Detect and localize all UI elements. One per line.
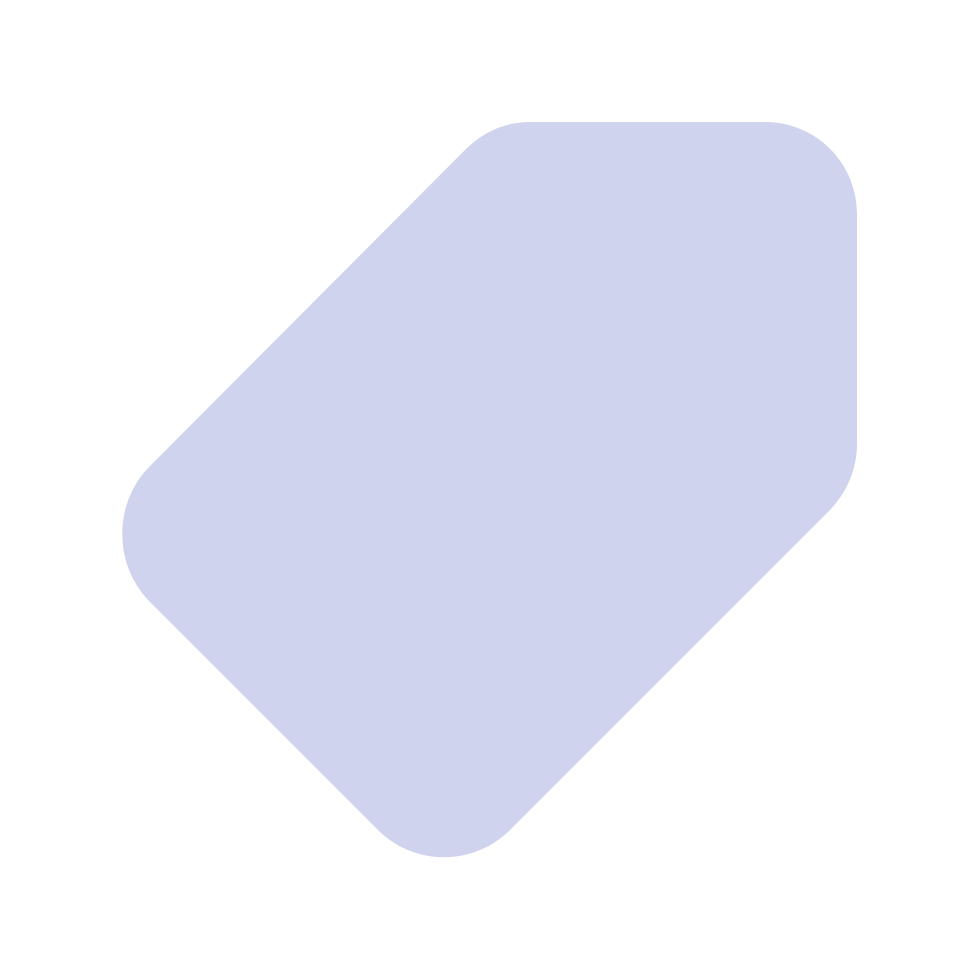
icon: price tag shape	[122, 122, 857, 857]
